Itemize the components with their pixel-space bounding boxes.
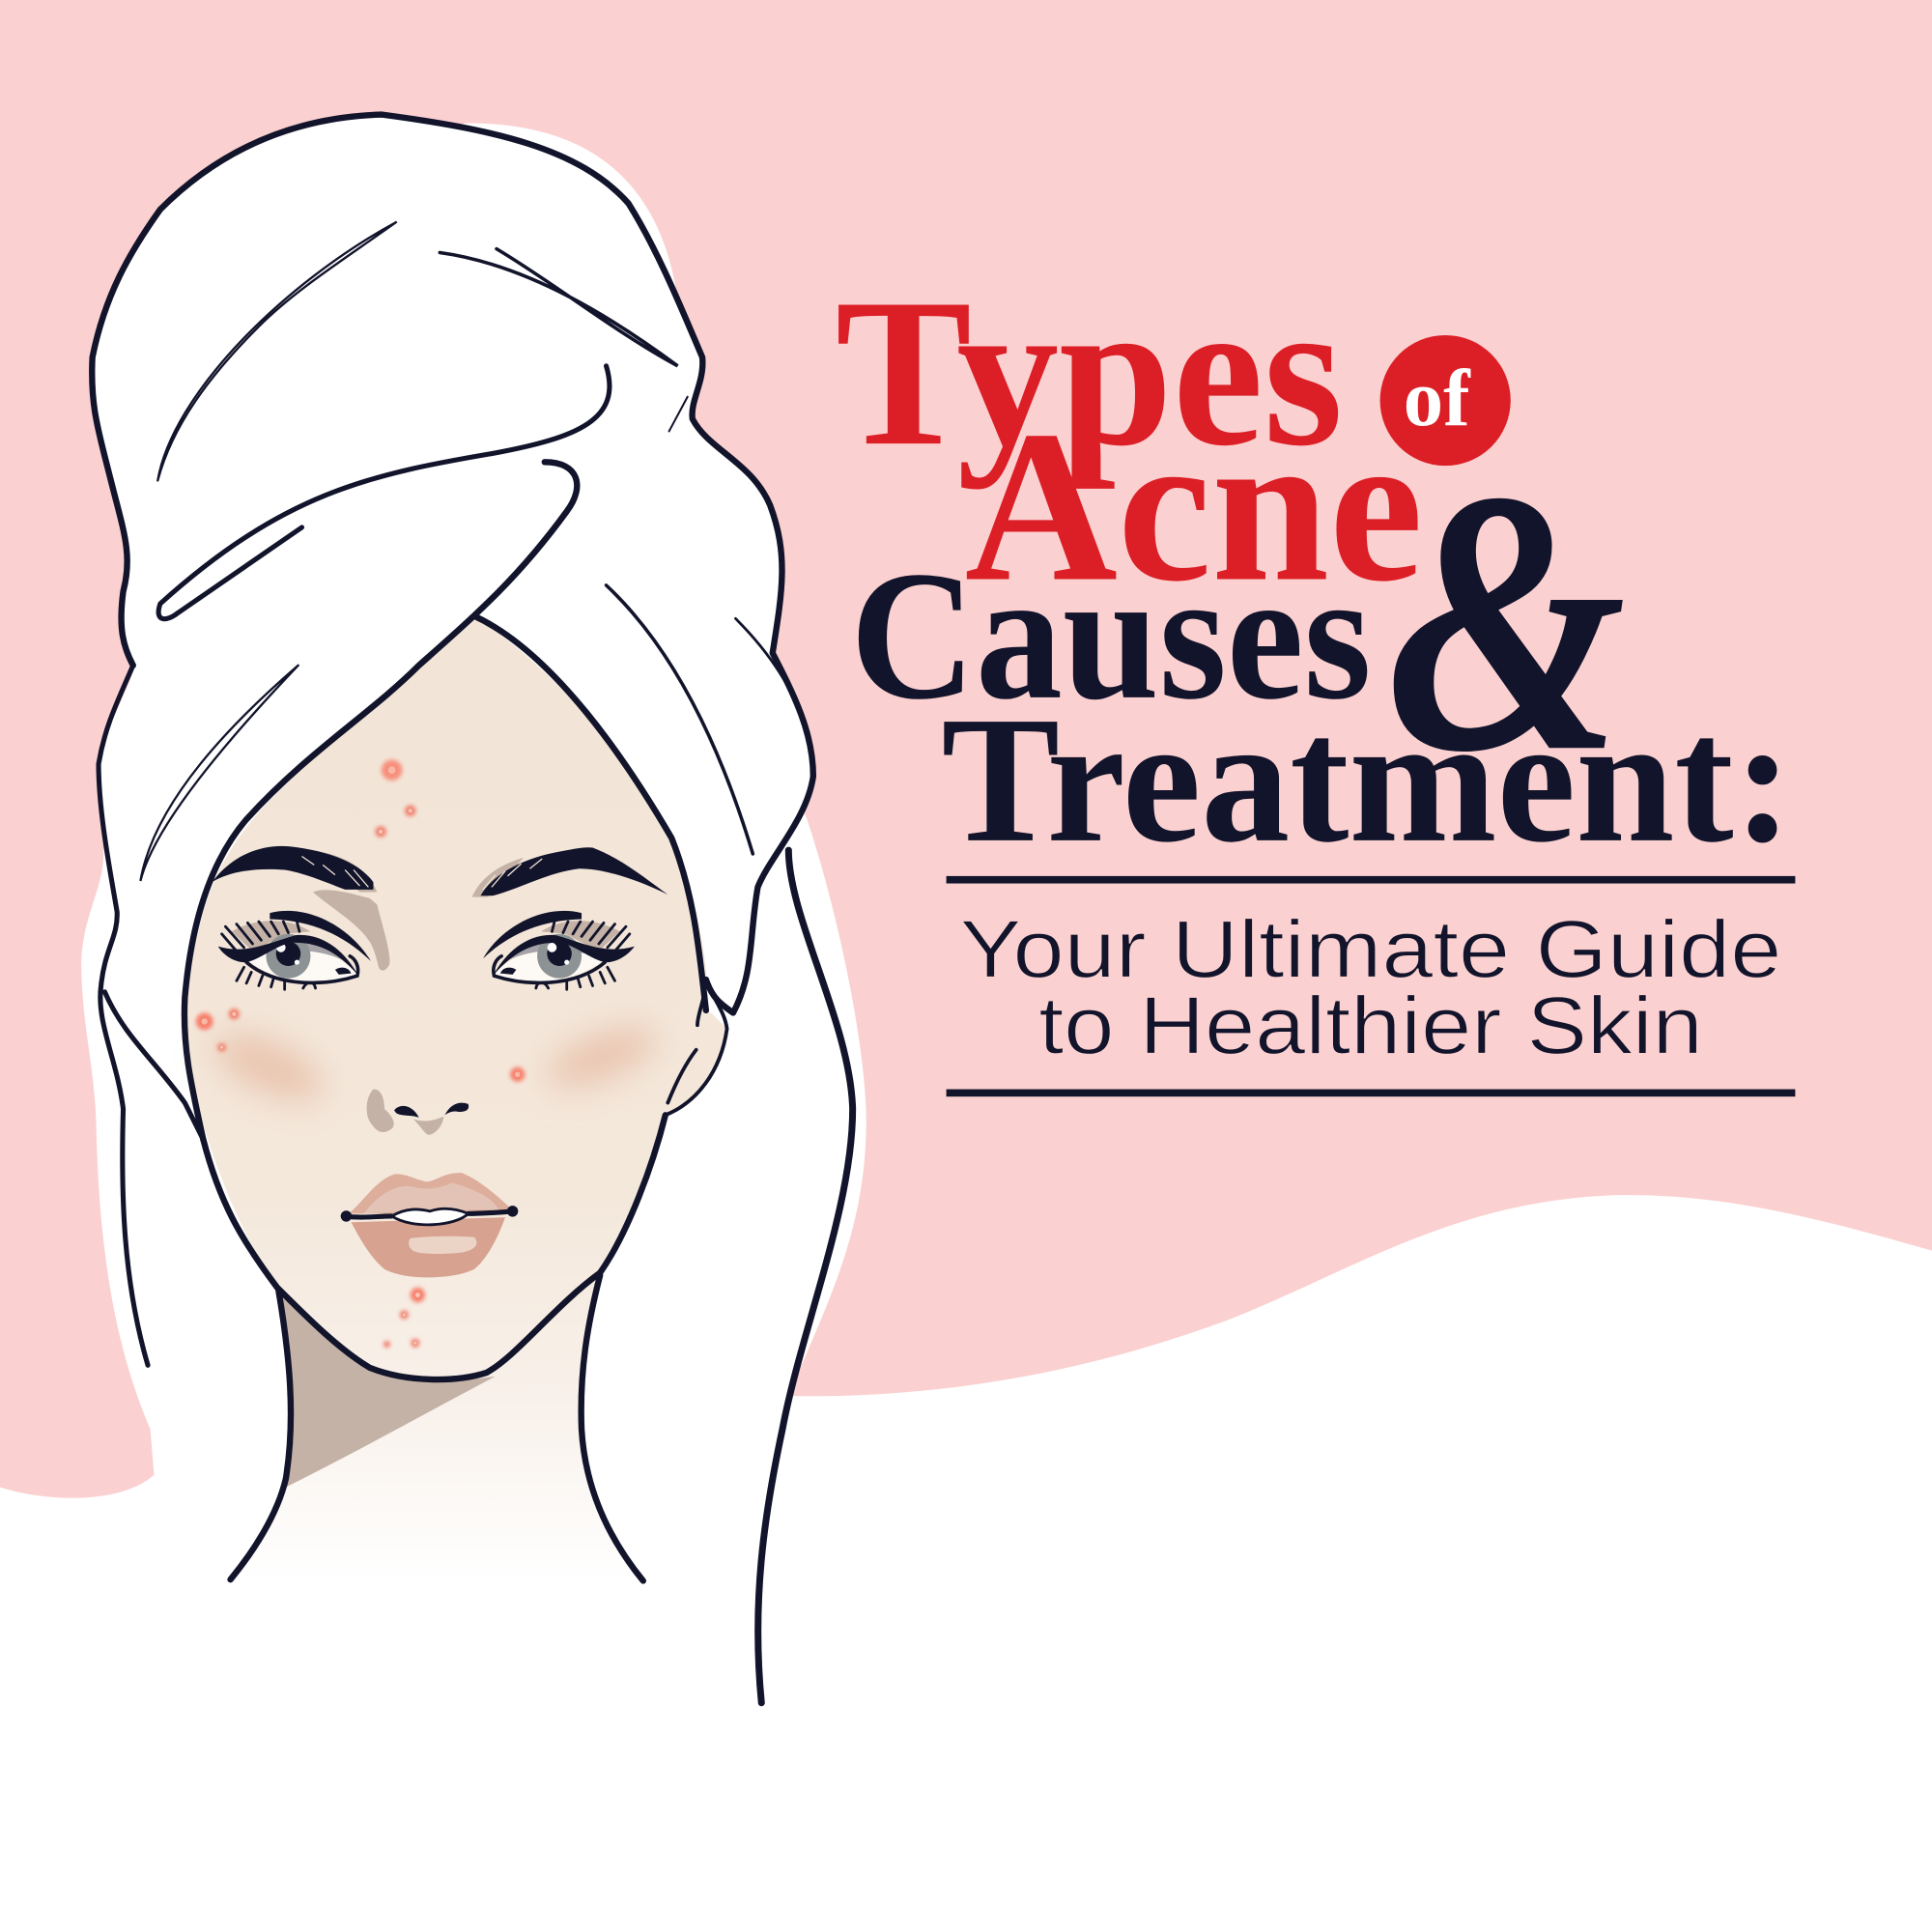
towel fold: main sweep bbox=[158, 366, 610, 619]
left cheek blush bbox=[205, 1020, 332, 1115]
right eye bbox=[483, 911, 635, 989]
towel outline bbox=[92, 115, 813, 1012]
subtitle bbox=[960, 903, 1781, 1071]
ear bbox=[666, 980, 727, 1115]
badge: of bbox=[1380, 335, 1511, 466]
subtitle line 1: Your Ultimate Guide bbox=[960, 903, 1781, 994]
title: Acne: Acne bbox=[965, 385, 1423, 626]
towel fold: small tuck bbox=[669, 397, 688, 431]
badge: of: of bbox=[1404, 354, 1471, 443]
lips bbox=[341, 1173, 518, 1277]
right eyebrow bbox=[472, 847, 668, 897]
illustration: woman with towel bbox=[92, 115, 853, 1703]
jaw line bbox=[203, 1115, 666, 1379]
acne spots bbox=[196, 759, 525, 1348]
towel fold: far right bbox=[735, 618, 807, 733]
towel fold: lower left bbox=[140, 666, 298, 881]
neck shadow bbox=[278, 1290, 496, 1488]
bottom rule bbox=[947, 1090, 1795, 1096]
subtitle line 2: to Healthier Skin bbox=[1038, 980, 1703, 1071]
nose bridge shadow bbox=[313, 890, 389, 971]
left hair outline bbox=[99, 666, 148, 1365]
towel edge across forehead bbox=[185, 462, 577, 1140]
towel fold: upper right bbox=[440, 249, 678, 366]
left eye bbox=[218, 911, 371, 989]
right cheek blush bbox=[538, 1014, 665, 1100]
title: Causes: Causes bbox=[850, 534, 1372, 738]
towel and hair fill bbox=[92, 115, 853, 1700]
towel edge right of forehead bbox=[474, 616, 706, 1010]
title: Types: Types bbox=[836, 256, 1343, 490]
nose bbox=[367, 1090, 469, 1135]
neck left line bbox=[231, 1290, 291, 1579]
left hair inner strand bbox=[104, 992, 203, 1140]
right hair outline bbox=[758, 850, 853, 1703]
face and neck skin bbox=[187, 616, 727, 1580]
title block bbox=[836, 256, 1793, 880]
left eyebrow bbox=[212, 846, 377, 892]
title: Treatment: Treatment: bbox=[941, 679, 1793, 880]
towel fold: right long bbox=[607, 585, 753, 854]
title: ampersand: & bbox=[1386, 413, 1627, 830]
top rule bbox=[947, 876, 1795, 884]
towel fold: upper left bbox=[157, 222, 397, 480]
neck right line bbox=[582, 1275, 643, 1580]
